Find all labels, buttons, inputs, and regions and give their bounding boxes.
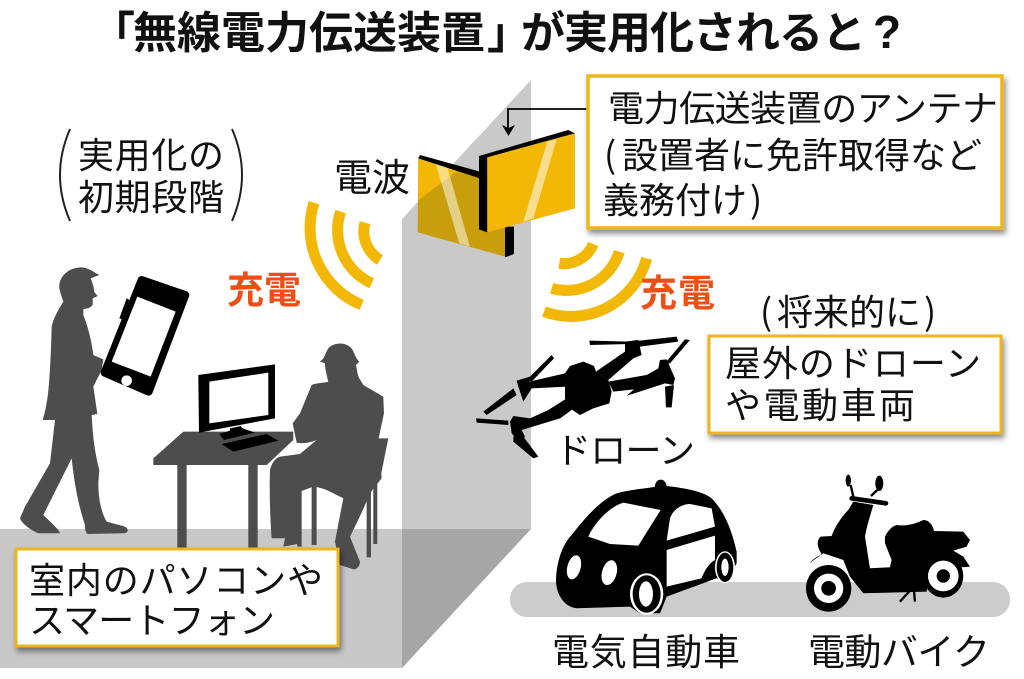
- desk with computer and seated person: [153, 344, 388, 569]
- title: 」: [487, 9, 531, 58]
- callout: outdoor devices: 屋外のドローン: [725, 343, 981, 384]
- icon: smartphone: [105, 280, 185, 392]
- title: 無線電力伝送装置: [133, 9, 485, 58]
- standing person with smartphone: [20, 267, 185, 534]
- callout: outdoor devices: や電動車両: [725, 385, 915, 426]
- arrow: to antenna: [502, 109, 588, 136]
- seated person silhouette: [270, 344, 384, 569]
- label: charging right: 充電: [640, 273, 715, 314]
- note: early stage of practical use: 初期段階: [78, 177, 224, 218]
- note: early stage of practical use: [60, 129, 242, 221]
- callout: antenna: 設置者に免許取得など: [622, 135, 982, 176]
- icon: antenna: [418, 130, 575, 257]
- icon: monitor and keyboard: [198, 364, 278, 452]
- callout: indoor devices: スマートフォン: [29, 600, 275, 641]
- note: in the future: (: [760, 284, 772, 336]
- callout: antenna: (: [604, 127, 616, 179]
- note: early stage of practical use: 実用化の: [78, 135, 224, 176]
- label: radio waves: 電波: [334, 158, 410, 200]
- callout: antenna: ): [750, 172, 762, 224]
- note: in the future: ): [924, 284, 936, 336]
- desk: [153, 432, 293, 550]
- icon: electric car: [556, 480, 737, 615]
- note: in the future: 将来的に: [777, 292, 921, 333]
- icon: right radio waves: [544, 244, 647, 316]
- label: charging left: 充電: [227, 270, 301, 311]
- standing person silhouette: [20, 267, 128, 534]
- icon: drone: [476, 337, 690, 458]
- callout: indoor devices: [16, 549, 338, 646]
- callout: outdoor devices: [709, 336, 1001, 433]
- callout: indoor devices: 室内のパソコンや: [29, 560, 323, 601]
- callout: antenna: 義務付け: [603, 180, 747, 221]
- title: 「: [91, 9, 135, 58]
- label: electric car: 電気自動車: [552, 632, 740, 673]
- title: ?: [873, 6, 901, 58]
- icon: electric scooter: [806, 475, 970, 612]
- chair: [297, 438, 388, 557]
- callout: antenna: 電力伝送装置のアンテナ: [608, 88, 998, 129]
- label: drone: ドローン: [555, 430, 695, 471]
- callout: antenna: [588, 76, 1002, 228]
- road: [510, 582, 1010, 617]
- icon: left radio waves: [310, 203, 380, 305]
- label: electric bike: 電動バイク: [808, 632, 990, 673]
- room wall and floor: [0, 80, 531, 668]
- title: が実用化されると: [521, 9, 865, 58]
